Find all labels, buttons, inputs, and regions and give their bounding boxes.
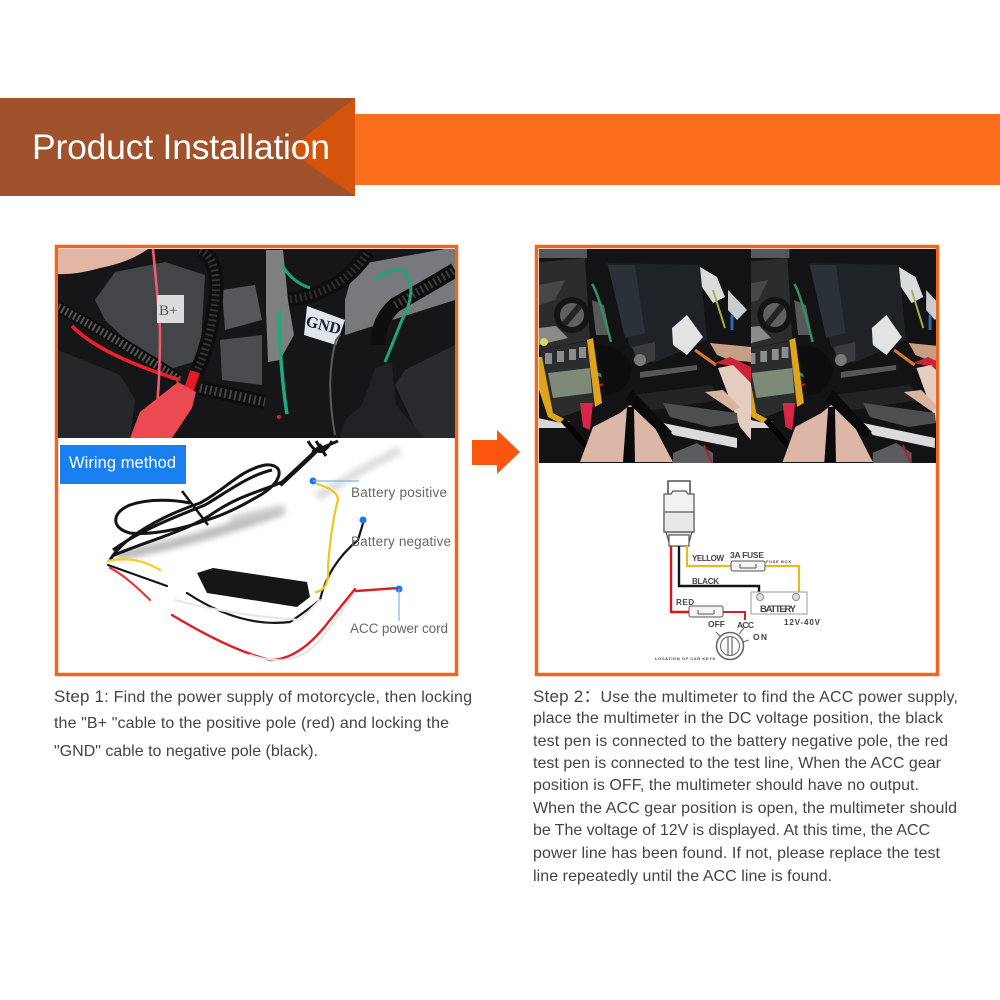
text: step 1 description: the "B+ "cable to the positive pole (red) and locking the (54, 715, 449, 732)
wiring method tag: Wiring method (69, 454, 176, 472)
title ribbon (0, 98, 355, 196)
ignition switch (716, 628, 749, 660)
text: step 2 description: power line has been found. If not, please replace the test (533, 845, 941, 862)
callout: battery negative: Battery negative (351, 534, 451, 549)
text: step 2 description: position is OFF, the multimeter should have no output. (533, 777, 919, 794)
diagram labels: OFF (708, 619, 725, 629)
text: step 2 description: test pen is connected to the battery negative pole, the red (533, 733, 948, 750)
text: step 1 description (54, 687, 472, 760)
orange band (355, 114, 1000, 185)
title: Product Installation (32, 127, 330, 167)
text: step 1 description: "GND" cable to negative pole (black). (54, 743, 318, 760)
diagram labels (655, 550, 821, 661)
ribbon notch (288, 98, 355, 196)
photo: B+ and GND cables (50, 245, 460, 440)
photo: multimeter 12V output (751, 249, 936, 463)
wires (671, 546, 799, 620)
fuse: red line (689, 606, 723, 617)
text: step 2 description: be The voltage of 12V is displayed. At this time, the ACC (533, 822, 930, 839)
callout: battery positive: Battery positive (351, 485, 447, 500)
diagram labels: LOCATION OF CAR KEYS (655, 656, 715, 661)
callout: battery positive (310, 478, 447, 500)
diagram labels: FUSE BOX (766, 559, 791, 564)
wiring callouts (310, 478, 451, 636)
diagram labels: RED (676, 598, 694, 607)
panel frame (56, 246, 456, 674)
callout: ACC power cord: ACC power cord (350, 621, 448, 636)
callout: battery negative (351, 516, 451, 549)
text: step 2 description: line repeatedly until the ACC line is found. (533, 868, 832, 885)
panel frame (536, 246, 938, 674)
panel: step 2 (530, 240, 967, 674)
diagram labels: ON (753, 632, 767, 642)
text: step 2 description: place the multimeter in the DC voltage position, the black (533, 710, 944, 727)
text: step 2 description: Step 2：Use the multimeter to find the ACC power supply, (533, 687, 958, 706)
header banner (0, 98, 1000, 196)
diagram labels: ACC (737, 620, 754, 630)
fuse: 3A (731, 561, 765, 571)
relay (664, 481, 694, 546)
battery: BATTERY (760, 604, 797, 615)
callout: ACC power cord (350, 586, 448, 636)
wiring diagram (655, 481, 821, 661)
text: step 2 description: test pen is connected to the test line, When the ACC gear (533, 755, 942, 772)
diagram labels: BLACK (692, 577, 719, 586)
battery (751, 592, 807, 615)
diagram labels: 12V-40V (784, 618, 821, 627)
text: step 2 description (533, 687, 958, 885)
text: step 1 description: Step 1: Find the power supply of motorcycle, then locking (54, 687, 472, 706)
photo: multimeter no output (539, 249, 751, 463)
panel: step 1 (50, 245, 460, 674)
diagram labels: YELLOW (692, 554, 724, 563)
diagram labels: 3A FUSE (730, 550, 764, 560)
label: GND: GND (304, 313, 343, 338)
arrow (472, 430, 520, 474)
wiring harness photo (108, 441, 400, 660)
label: B+: B+ (159, 303, 177, 319)
text: step 2 description: When the ACC gear position is open, the multimeter should (533, 800, 957, 817)
wiring method tag (60, 445, 186, 484)
